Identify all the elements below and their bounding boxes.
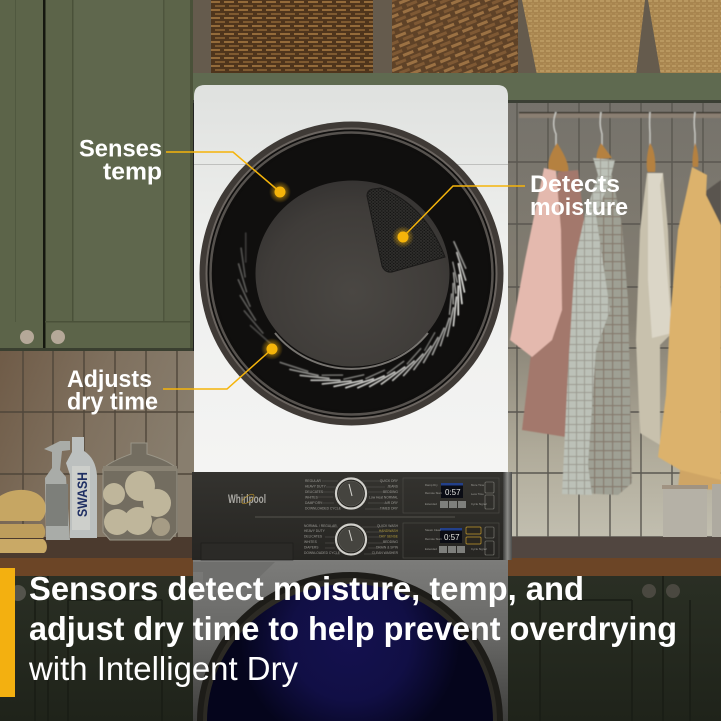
washer cycle labels: NORMAL / REGULAR — [304, 524, 337, 528]
background: shelf wall — [193, 0, 721, 80]
garment: cream sleeve — [648, 173, 672, 338]
wicker basket 2 — [392, 0, 518, 75]
panel: control panel — [192, 472, 512, 560]
wicker basket 1 — [211, 0, 373, 73]
bottle brand label: SWASH — [74, 472, 90, 517]
washer display: 0:57 — [444, 533, 460, 542]
icon: lower knob right — [666, 584, 680, 598]
garment: yellow shirt hem — [678, 470, 721, 490]
washer cycle labels: DELICATES — [304, 534, 323, 538]
washer cycle labels: HANDWASH — [379, 529, 399, 533]
caption — [28, 570, 677, 687]
dryer cycle labels: WHITES — [305, 496, 319, 500]
washer controls box: Extended — [425, 547, 437, 551]
dryer dial — [336, 478, 366, 508]
brand logo — [228, 492, 266, 506]
washer cycle labels: WHITES — [304, 540, 318, 544]
dryer cycle labels: AIR DRY — [385, 501, 399, 505]
caption line 3: with Intelligent Dry — [28, 650, 298, 687]
shelf — [193, 73, 721, 103]
drum rear disk — [256, 180, 450, 366]
dryer cycle labels: QUICK DRY — [380, 479, 399, 483]
callout glow dot — [392, 226, 414, 248]
washer cycle labels: BEDDING — [383, 540, 398, 544]
icon: lower knob left — [10, 585, 26, 601]
sensor grille — [367, 188, 445, 272]
counter top — [0, 537, 721, 576]
washer controls box: Cycle Signal — [471, 547, 487, 551]
dryer cycle labels: REGULAR — [305, 479, 322, 483]
garment: pink sleeve — [510, 168, 562, 357]
dryer cycle labels: BEDDING — [383, 490, 398, 494]
washer cycle labels: HEAVY DUTY — [304, 529, 326, 533]
dial leader lines — [318, 481, 385, 554]
dryer door — [200, 122, 504, 426]
dryer cycle labels: DOWNLOADED CYCLE — [305, 506, 342, 510]
dryer controls box: Remote Start — [425, 491, 442, 495]
dryer cycle labels — [305, 479, 399, 510]
icon: cabinet knob left — [20, 330, 34, 344]
icon: lower knob centre — [642, 584, 656, 598]
garment: cream blouse — [636, 173, 672, 445]
dryer cycle labels: HEAVY DUTY — [305, 484, 327, 488]
washer door — [197, 572, 503, 721]
wicker basket 4 — [648, 0, 721, 76]
dryer balls — [103, 471, 171, 536]
dryer cycle labels: DELICATES — [305, 490, 324, 494]
folded towels — [0, 490, 47, 553]
hangers — [548, 112, 698, 172]
garment: dark grey at far right — [703, 180, 721, 275]
washer cycle labels: DRAIN & SPIN — [376, 546, 399, 550]
callout glow dot — [269, 181, 291, 203]
washer cycle labels: QUICK WASH — [377, 524, 399, 528]
washer cycle labels: DRY SENSE — [379, 534, 399, 538]
panel: hanging clothes — [510, 112, 721, 495]
panel: dryer body — [194, 85, 508, 472]
callout leader line — [403, 186, 525, 237]
dryer cycle labels: JEANS — [387, 484, 399, 488]
callout label: temp — [103, 158, 162, 186]
wicker basket 3 — [522, 0, 645, 75]
callout leader line — [163, 349, 272, 389]
glass jar with dryer balls — [103, 443, 177, 540]
dryer controls box: More Time — [471, 483, 485, 487]
callout leader line — [166, 152, 280, 192]
garment: plaid sleeve — [562, 158, 615, 495]
garment: yellow shirt — [658, 167, 721, 490]
panel: left tile backsplash — [0, 351, 194, 541]
dryer controls box: Damp Dry — [425, 483, 438, 487]
washer cycle labels: DOWNLOADED CYCLE — [304, 551, 341, 555]
icon: cabinet knob right — [51, 330, 65, 344]
callout label: Senses — [79, 136, 162, 162]
clothes rail — [519, 112, 721, 118]
garment: pink shirt body — [522, 170, 584, 437]
callout label: dry time — [67, 388, 158, 416]
dryer controls box: Extended — [425, 502, 437, 506]
washer dial — [336, 524, 366, 554]
washer panel bracket — [193, 562, 275, 588]
panel: left cabinet — [0, 0, 193, 351]
callout label: Detects — [530, 171, 620, 198]
callout label: Adjusts — [67, 366, 152, 393]
washer cycle labels: CLEAN WASHER — [372, 551, 399, 555]
washer controls box: Steam Clean — [425, 528, 442, 532]
caption line 1: Sensors detect moisture, temp, and — [29, 570, 584, 607]
dryer cycle labels: TIMED DRY — [380, 506, 399, 510]
callout: adjusts dry time — [67, 338, 283, 416]
washer cycle labels: DIAPERS — [304, 546, 319, 550]
dryer controls box: Less Time — [471, 492, 484, 496]
caption line 2: adjust dry time to help prevent overdrying — [29, 610, 677, 647]
dryer controls box — [403, 478, 499, 513]
washer cycle labels — [304, 524, 399, 555]
bottom washer cabinets — [0, 576, 721, 721]
dryer cycle labels: DAMP DRY — [305, 501, 323, 505]
callout: senses temp — [79, 136, 291, 203]
callout glow dot — [261, 338, 283, 360]
drum lower lip highlight — [275, 333, 428, 369]
washer controls box: Remote Start — [425, 537, 442, 541]
dryer cycle labels: Low Heat NORMAL — [369, 496, 398, 500]
accent bar — [0, 568, 15, 697]
spray bottle — [44, 441, 70, 540]
dryer display: 0:57 — [445, 488, 461, 497]
dryer controls box: Cycle Signal — [471, 502, 487, 506]
callout: detects moisture — [392, 171, 628, 248]
panel: washer — [193, 560, 508, 721]
detergent bottle — [66, 437, 97, 538]
callout label: moisture — [530, 194, 628, 221]
washer controls box — [403, 523, 499, 558]
brand logo: Whirlpool — [228, 492, 266, 506]
panel: right tile wall — [508, 100, 721, 540]
ceramic pot right — [662, 484, 721, 541]
garment: plaid shirt body — [580, 175, 632, 495]
drum fins — [238, 233, 466, 388]
